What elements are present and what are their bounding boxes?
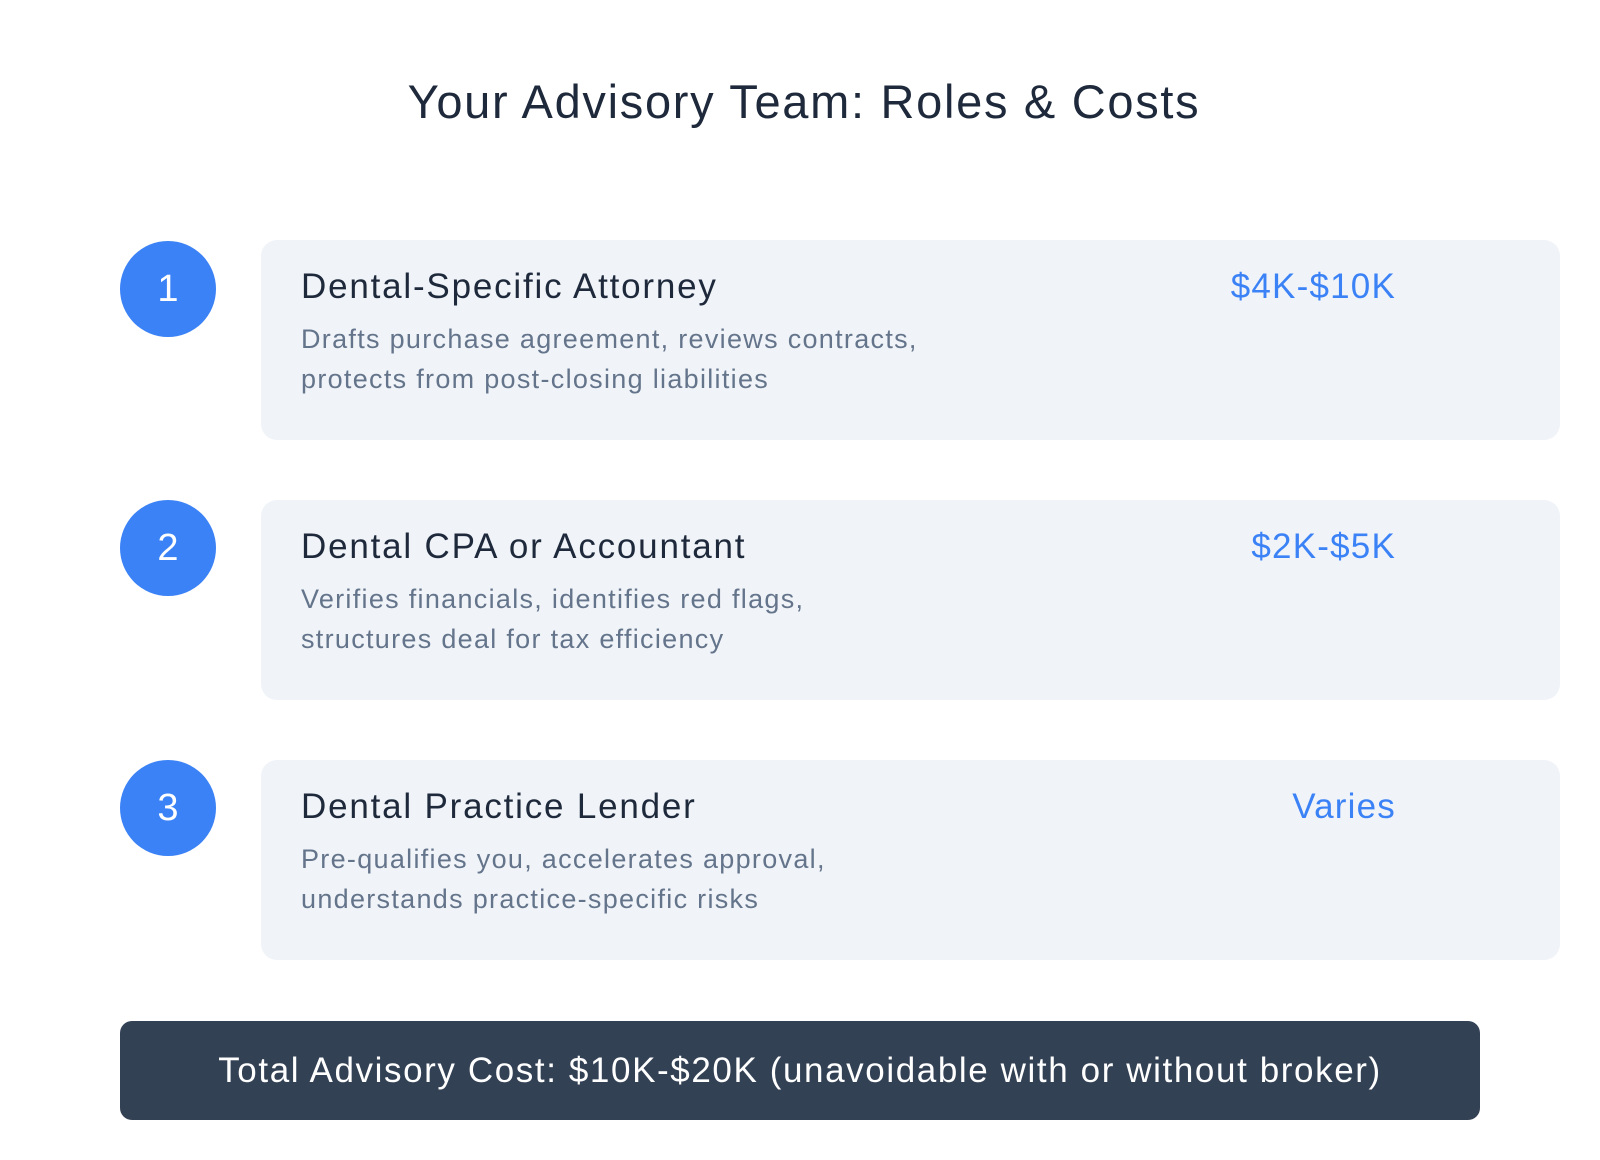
icon: number 1: [120, 241, 216, 337]
panel: lender: [261, 760, 1560, 960]
icon: number 2: 2: [157, 527, 179, 569]
text: lender description: [301, 844, 826, 914]
icon: number 1: 1: [157, 268, 179, 310]
text: attorney description: [301, 324, 918, 394]
text: lender description: Pre-qualifies you, accelerates approval,: [301, 844, 826, 874]
icon: number 3: [120, 760, 216, 856]
icon: number 3: 3: [157, 787, 179, 829]
text: CPA description: Verifies financials, identifies red flags,: [301, 584, 804, 614]
price: lender: Varies: [1292, 787, 1396, 826]
price: CPA: $2K-$5K: [1251, 527, 1396, 566]
title: Your Advisory Team: Roles & Costs: [408, 75, 1200, 128]
heading: attorney: Dental-Specific Attorney: [301, 267, 718, 306]
price: attorney: $4K-$10K: [1231, 267, 1396, 306]
text: attorney description: protects from post-closing liabilities: [301, 364, 769, 394]
icon: number 2: [120, 500, 216, 596]
text: attorney description: Drafts purchase agreement, reviews contracts,: [301, 324, 918, 354]
text: CPA description: structures deal for tax efficiency: [301, 624, 724, 654]
heading: lender: Dental Practice Lender: [301, 787, 697, 826]
heading: CPA: Dental CPA or Accountant: [301, 527, 746, 566]
total cost bar: Total Advisory Cost: $10K-$20K (unavoidable with or without broker): [218, 1051, 1382, 1090]
panel: CPA: [261, 500, 1560, 700]
text: CPA description: [301, 584, 804, 654]
total cost bar: [120, 1021, 1480, 1120]
text: lender description: understands practice-specific risks: [301, 884, 759, 914]
panel: attorney: [261, 240, 1560, 440]
